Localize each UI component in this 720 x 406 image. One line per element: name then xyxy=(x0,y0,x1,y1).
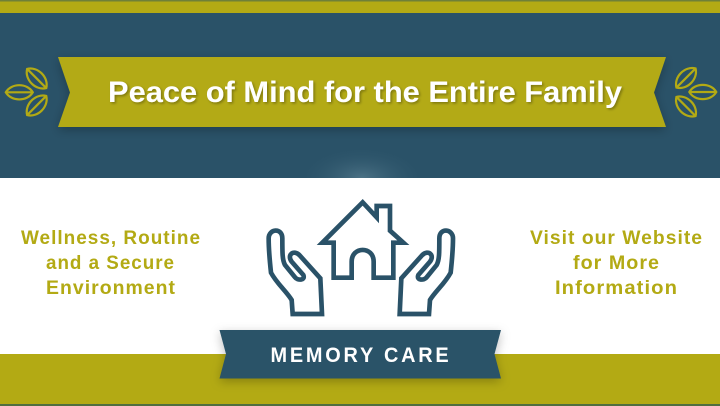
icon: right leaves xyxy=(671,63,716,121)
left text block: Wellness, Routine xyxy=(21,228,201,249)
title: Peace of Mind for the Entire Family xyxy=(108,76,622,109)
icon: hands holding a house xyxy=(269,202,453,314)
icon: left leaves xyxy=(6,64,51,120)
icon: right hand xyxy=(400,231,453,314)
white middle panel xyxy=(0,178,720,354)
right text block: for More xyxy=(573,253,660,274)
bottom olive band xyxy=(0,354,720,406)
right text block: Information xyxy=(555,278,678,299)
icon: house xyxy=(322,202,403,278)
blue header panel xyxy=(0,13,720,178)
left text block: and a Secure xyxy=(46,253,175,274)
left text block xyxy=(21,228,201,299)
icon: left hand xyxy=(269,231,322,314)
left text block: Environment xyxy=(46,278,176,299)
right text block: Visit our Website xyxy=(530,228,703,249)
top olive band xyxy=(0,0,720,13)
title banner xyxy=(58,57,666,127)
right text block xyxy=(530,228,703,299)
banner label: MEMORY CARE xyxy=(270,343,452,367)
memory care banner xyxy=(220,330,501,378)
